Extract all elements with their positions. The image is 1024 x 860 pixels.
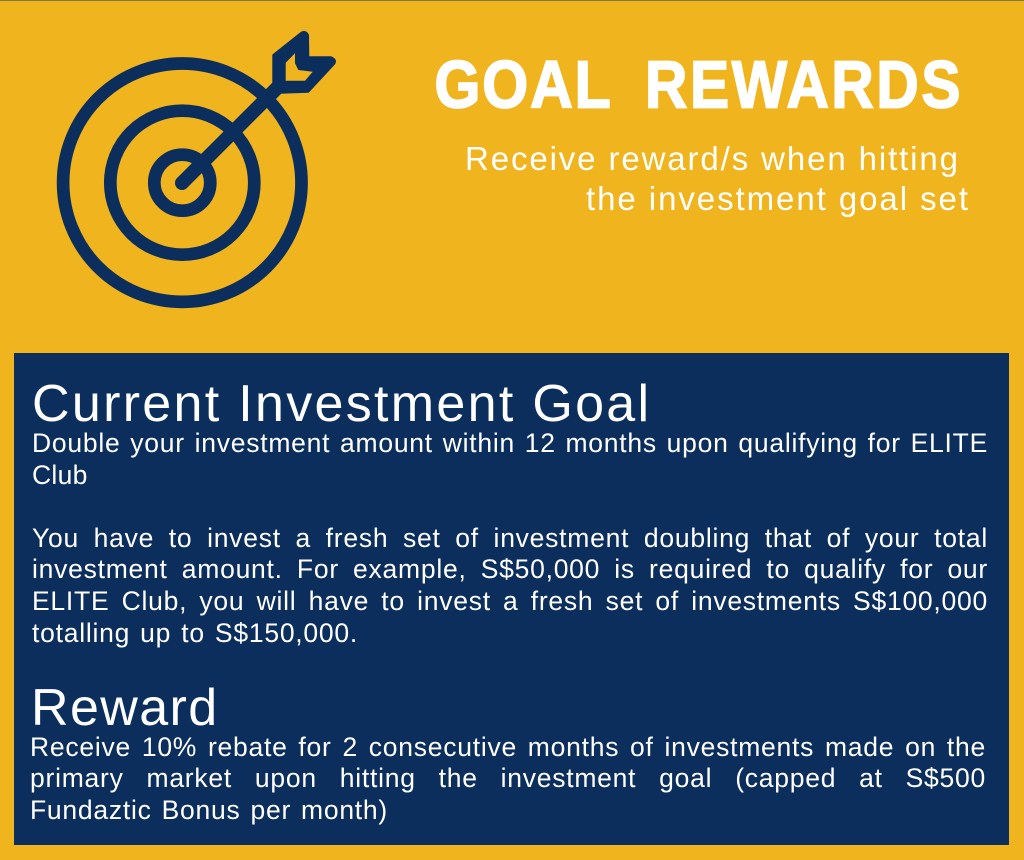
text block: reward details: Receive 10% rebate for 2 consecutive months of investments made on the — [30, 732, 986, 762]
text block: reward details: Fundaztic Bonus per month) — [30, 795, 388, 825]
text block: reward details — [30, 732, 986, 825]
text block: goal explanation: investment amount. For example, S$50,000 is required to qualify for our — [32, 554, 988, 584]
text block: goal summary: Double your investment amount within 12 months upon qualifying for ELITE — [32, 428, 988, 458]
text block: reward details: primary market upon hitting the investment goal (capped at S$500 — [30, 763, 986, 793]
icon: target with arrow — [63, 32, 335, 302]
subtitle — [465, 140, 968, 217]
text block: goal summary — [32, 428, 988, 490]
text block: goal explanation: You have to invest a fresh set of investment doubling that of your total — [32, 523, 988, 553]
subtitle: the investment goal set — [586, 180, 968, 217]
header band — [56, 30, 968, 308]
text block: goal explanation: ELITE Club, you will have to invest a fresh set of investments S$100,000 — [32, 586, 988, 616]
title — [434, 48, 960, 122]
heading: current investment goal: Current Investment Goal — [32, 375, 651, 433]
title: REWARDS — [645, 48, 960, 122]
subtitle: Receive reward/s when hitting — [465, 140, 958, 177]
title: GOAL — [434, 48, 611, 122]
panel: goal details — [14, 353, 1009, 845]
heading: reward: Reward — [31, 679, 219, 737]
text block: goal summary: Club — [32, 460, 88, 490]
text block: goal explanation — [32, 523, 988, 648]
text block: goal explanation: totalling up to S$150,000. — [32, 618, 358, 648]
